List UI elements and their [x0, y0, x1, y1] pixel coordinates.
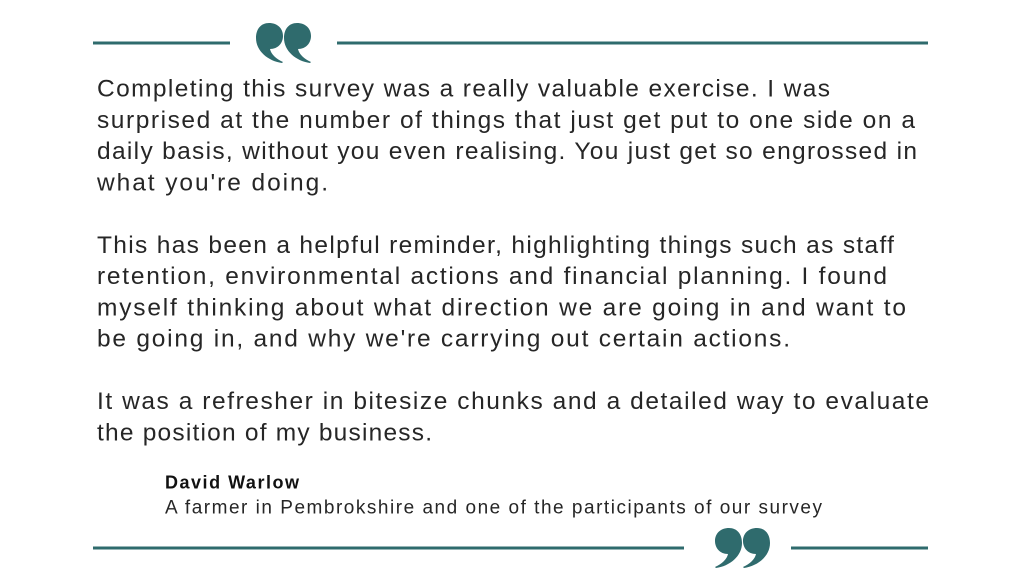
top rule right — [337, 42, 928, 44]
quote paragraph 2: retention, environmental actions and financial planning. I found — [97, 263, 887, 290]
quote paragraph 1 — [96, 76, 917, 196]
quote paragraph 1: daily basis, without you even realising. You just get so engrossed in — [97, 138, 917, 165]
attribution name: David Warlow — [165, 472, 300, 492]
bottom rule right — [791, 546, 928, 550]
icon: closing quotation mark — [715, 528, 770, 568]
quote paragraph 2: be going in, and why we're carrying out certain actions. — [97, 326, 790, 352]
quote paragraph 2: myself thinking about what direction we are going in and want to — [97, 294, 906, 321]
quote paragraph 2: This has been a helpful reminder, highlighting things such as staff — [97, 232, 894, 259]
quote paragraph 3: It was a refresher in bitesize chunks and a detailed way to evaluate — [97, 388, 929, 415]
bottom rule left — [93, 546, 684, 550]
quote paragraph 3: the position of my business. — [97, 419, 432, 446]
quote paragraph 1: surprised at the number of things that just get put to one side on a — [97, 107, 915, 134]
top rule left — [93, 42, 230, 44]
quote paragraph 3 — [97, 388, 929, 446]
attribution role: A farmer in Pembrokshire and one of the participants of our survey — [165, 498, 822, 518]
icon: opening quotation mark — [256, 23, 311, 63]
quote paragraph 1: Completing this survey was a really valuable exercise. I was — [97, 76, 830, 102]
quote paragraph 2 — [97, 232, 906, 352]
quote paragraph 1: what you're doing. — [96, 169, 328, 196]
